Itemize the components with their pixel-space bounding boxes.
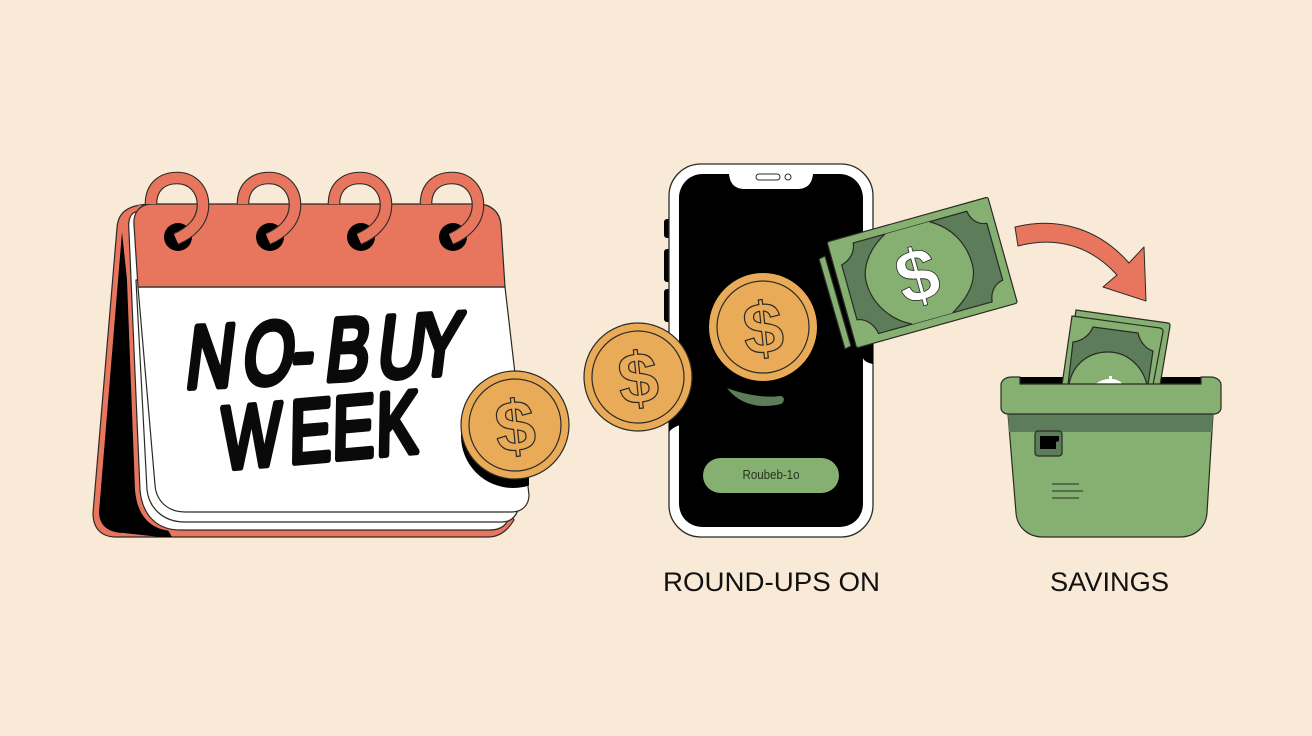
basket rim [1001,377,1221,414]
label: round-ups on: ROUND-UPS ON [663,567,880,597]
icon: calendar coin [461,371,569,488]
green smile on screen [727,388,784,406]
bill rear edge [819,256,851,349]
basket tag [1035,431,1062,456]
phone body [669,164,873,537]
phone side buttons [664,219,672,322]
icon: coin on phone screen: $ [739,287,787,371]
label: savings: SAVINGS [1050,567,1169,597]
bill medallion arcs [855,214,983,333]
bill medallion in basket [1069,352,1147,385]
bill front [827,197,1017,348]
basket opening [1020,377,1201,387]
icon: coin left of phone [584,323,692,431]
calendar binding rings [151,178,478,239]
icon: dollar bill [819,197,1017,349]
icon: coin left of phone: $ [614,337,662,421]
phone screen [679,174,863,527]
phone speaker [756,174,780,180]
calendar back cover [93,204,514,537]
calendar text: NO-BUY WEEK [182,293,469,489]
calendar back white page [129,212,509,530]
basket dark band [1008,414,1213,432]
phone camera [785,174,791,180]
bill centre medallion [855,214,983,333]
bill dollar in basket [1095,376,1123,385]
calendar red header [134,204,505,287]
round-ups button [703,458,839,493]
arrow to savings [1015,223,1146,301]
panel: savings basket [1001,310,1221,537]
panel: phone with round-ups [584,164,873,537]
button label: Roubeb-1o [742,467,800,482]
bill dark panel in basket [1068,327,1153,385]
icon: calendar coin: $ [491,385,539,469]
infographic illustration [92,163,1222,592]
calendar text: NO-BUY WEEK: WEEK [221,372,419,489]
panel: no-buy week calendar [93,204,529,537]
bill dark panel [837,207,1008,338]
calendar front page [138,287,529,512]
calendar second salmon layer [125,205,512,531]
basket body [1008,414,1213,537]
basket text lines [1052,484,1083,498]
screen overflow right of phone [860,336,873,364]
calendar black inner cover [99,232,172,537]
icon: coin on phone screen [709,273,817,381]
calendar text: NO-BUY WEEK: NO-BUY [182,293,469,407]
bills in basket [1062,310,1170,385]
calendar binding holes [164,223,467,251]
screen overflow left of phone [669,405,680,432]
calendar middle white page [136,280,518,522]
bill dollar sign: $ [886,230,948,321]
